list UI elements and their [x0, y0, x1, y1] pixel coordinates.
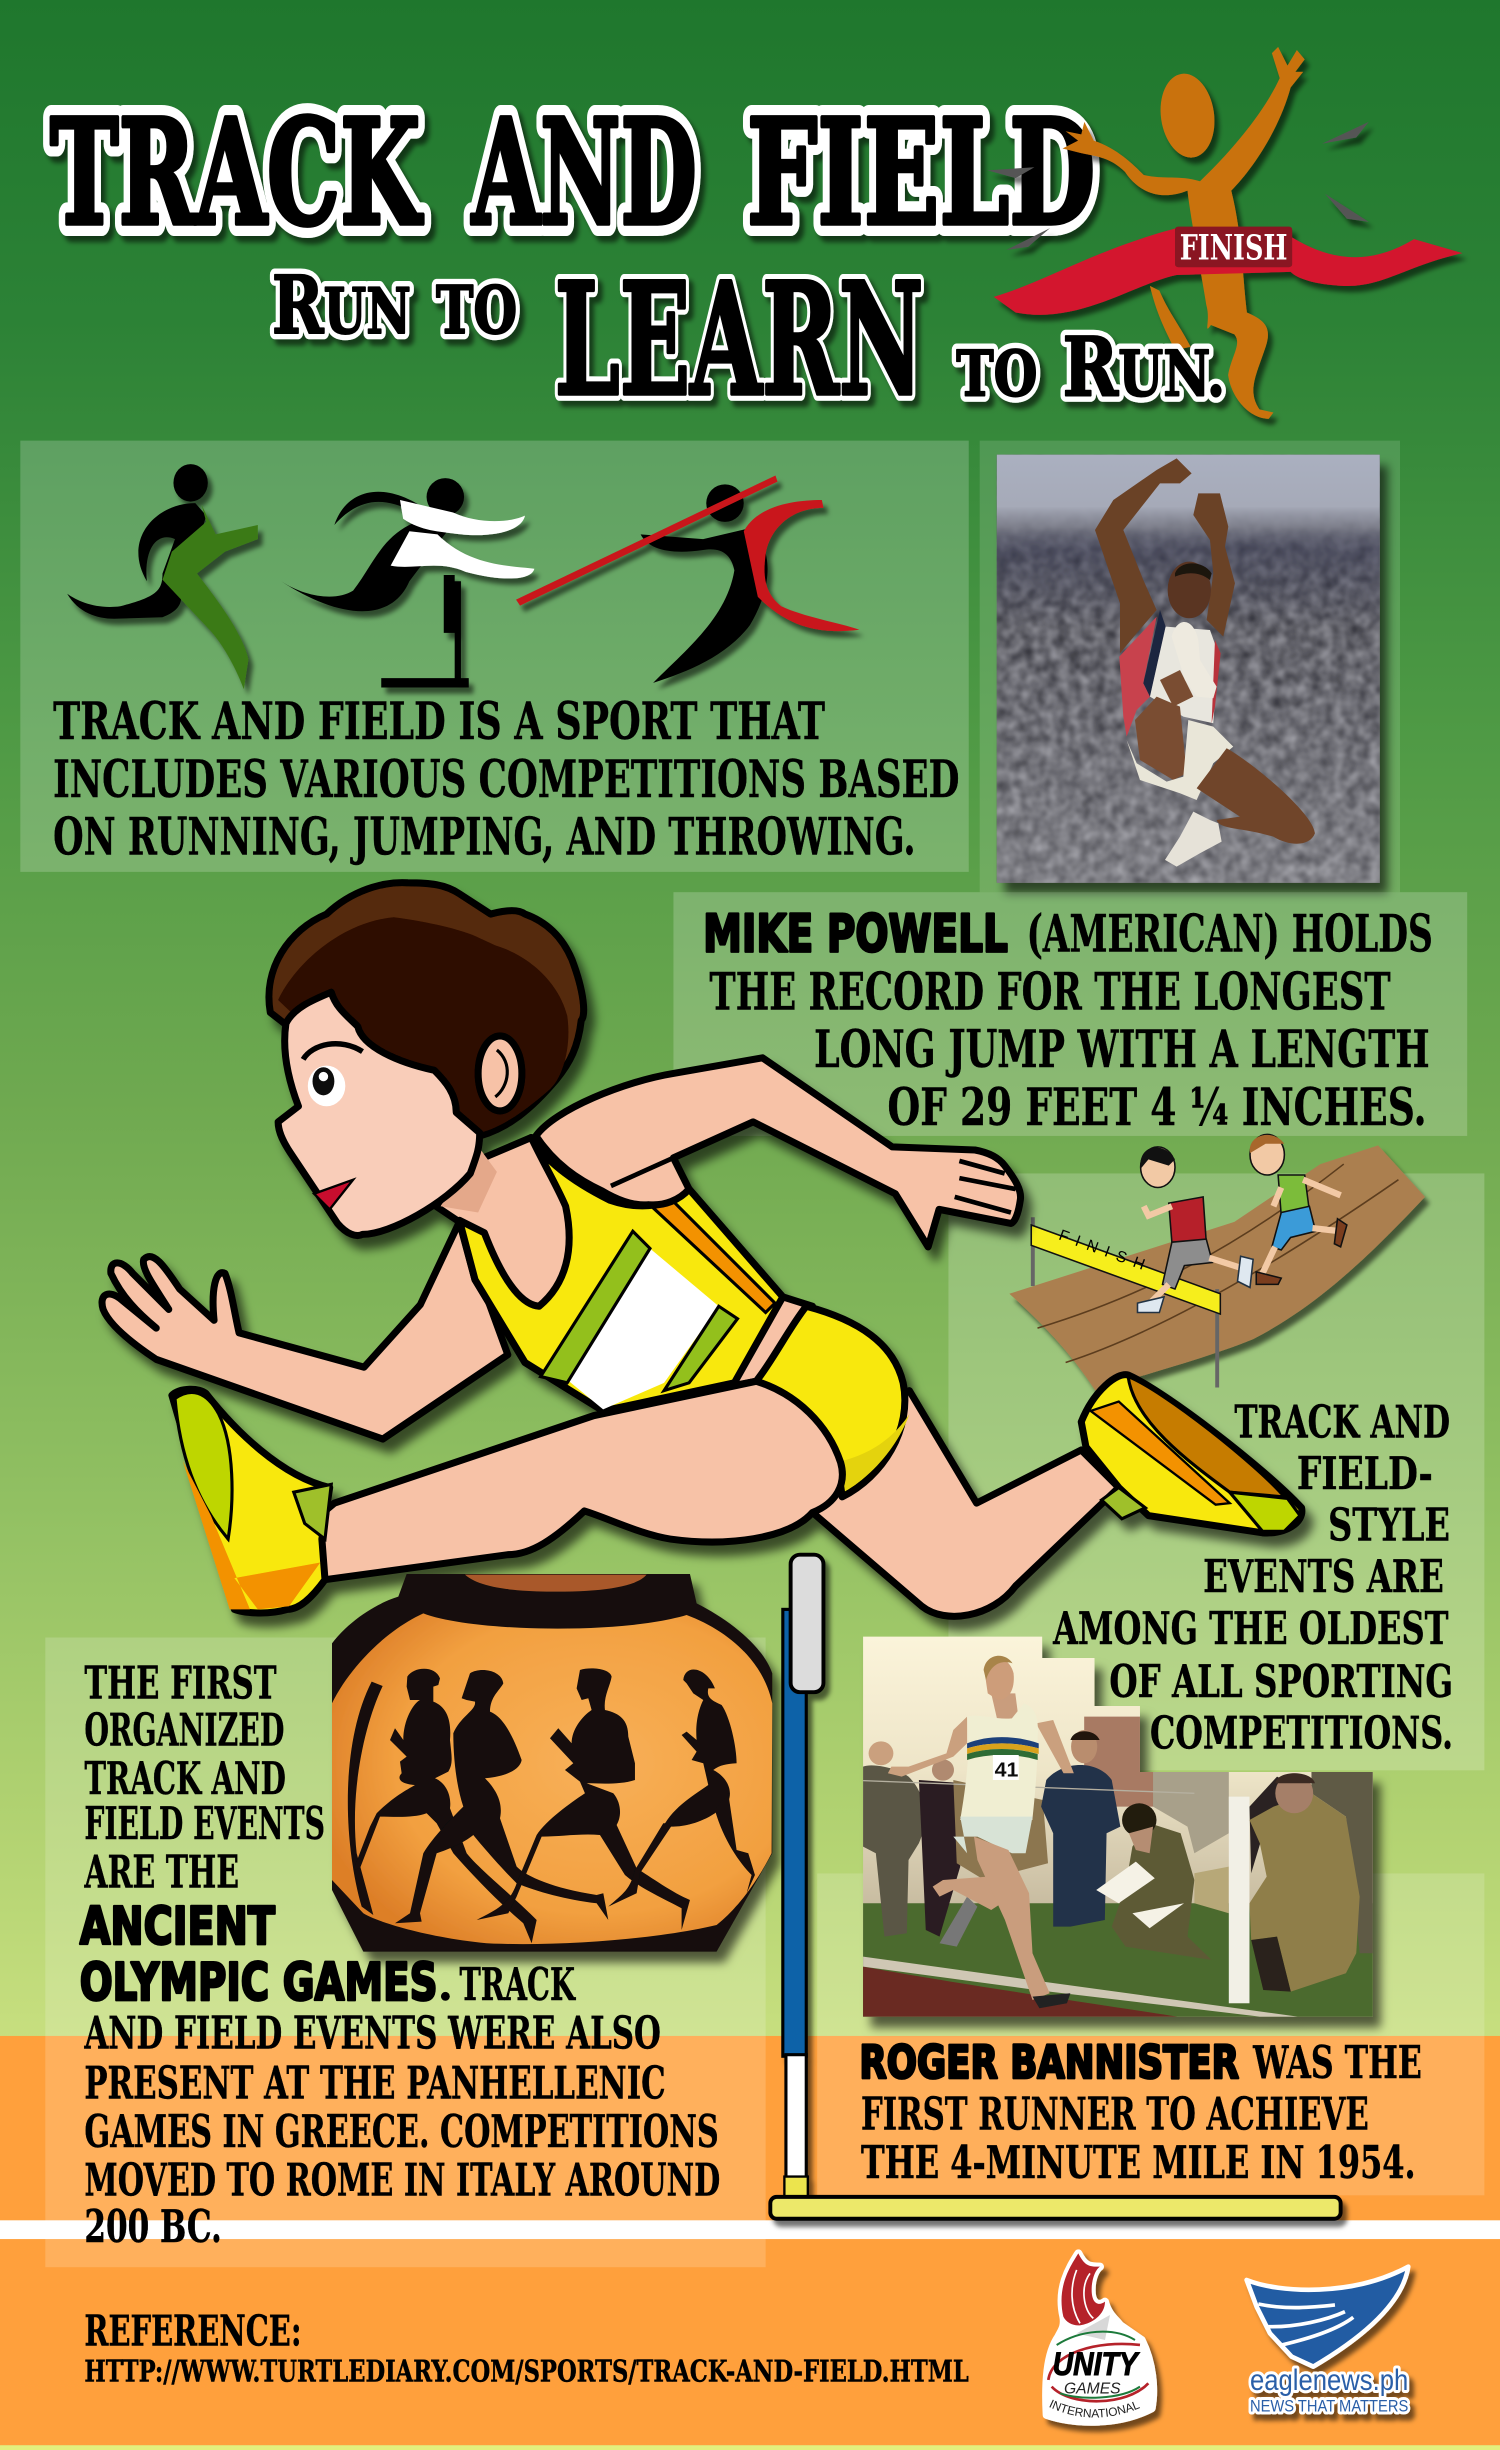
hurdle	[770, 1555, 1341, 2219]
hurdle pole	[783, 1609, 806, 2056]
building	[1084, 1717, 1194, 1807]
reference: HTTP://WWW.TURTLEDIARY.COM/SPORTS/TRACK-AND-FIELD.HTML	[84, 2353, 969, 2388]
sky	[997, 455, 1380, 627]
intro text: INCLUDES VARIOUS COMPETITIONS BASED	[53, 750, 959, 810]
subtitle	[272, 250, 1225, 431]
ancient olympics text: TRACK	[459, 1957, 576, 2011]
front thigh	[316, 1381, 842, 1580]
panel: intro	[20, 441, 969, 872]
head	[269, 883, 584, 1236]
crowd	[997, 455, 1380, 883]
Roger Bannister text: ROGER BANNISTER	[859, 2036, 1239, 2089]
pictogram: javelin thrower	[517, 477, 859, 683]
ancient olympics text: MOVED TO ROME IN ITALY AROUND	[84, 2152, 720, 2206]
photo: Mike Powell long jump	[997, 455, 1380, 883]
ancient olympics text: ARE THE	[84, 1844, 239, 1898]
intro text: TRACK AND FIELD IS A SPORT THAT	[53, 692, 825, 752]
subtitle outline: TO	[956, 336, 1038, 410]
subtitle letters	[272, 250, 1225, 431]
rings	[1048, 2344, 1148, 2401]
subtitle outline: TO	[436, 272, 517, 349]
finish line track illustration	[1009, 1134, 1425, 1391]
title letters: TRACK	[50, 88, 423, 258]
oldest events text: STYLE	[1328, 1498, 1450, 1552]
subtitle outline: RUN	[272, 258, 411, 352]
back leg	[781, 1391, 1119, 1616]
title outline: FIELD	[747, 88, 1095, 258]
logo: Unity Games International	[1042, 2249, 1166, 2436]
wing	[1247, 2267, 1408, 2367]
eyebrow	[303, 1044, 362, 1059]
track	[863, 1967, 1177, 2017]
vase runners	[353, 1668, 755, 1943]
subtitle letters: TO	[956, 336, 1038, 410]
orange lower band	[0, 2036, 1500, 2445]
subtitle letters: RUN	[272, 258, 411, 352]
finish ribbon	[994, 228, 1462, 315]
subtitle outline: RUN.	[1062, 320, 1225, 415]
logo: Eagle News	[1247, 2267, 1408, 2416]
intro text: ON RUNNING, JUMPING, AND THROWING.	[53, 808, 916, 868]
Mike Powell text	[703, 905, 1433, 1138]
title outline	[50, 88, 1095, 258]
ancient olympics text: FIELD EVENTS	[84, 1796, 325, 1850]
title outline: AND	[471, 88, 697, 258]
ancient olympics text: AND FIELD EVENTS WERE ALSO	[84, 2005, 661, 2059]
shorts shading	[842, 1414, 909, 1491]
title outline: TRACK	[50, 88, 423, 258]
Roger Bannister text	[859, 2035, 1422, 2189]
title	[50, 88, 1095, 258]
flame	[1062, 2253, 1105, 2325]
Roger running: 41	[995, 1759, 1019, 1782]
jumper	[1095, 458, 1315, 867]
white stripe	[0, 2220, 1500, 2239]
torso	[436, 1138, 812, 1411]
ancient olympics text: GAMES IN GREECE. COMPETITIONS	[84, 2104, 719, 2158]
hair	[269, 883, 584, 1136]
ancient olympics text: PRESENT AT THE PANHELLENIC	[84, 2055, 666, 2109]
bottom edge	[0, 2445, 1500, 2450]
reference	[84, 2305, 969, 2388]
subtitle letters: RUN.	[1062, 320, 1225, 415]
running child character	[102, 883, 1302, 1616]
Roger running	[888, 1656, 1074, 2008]
finish tag: FINISH	[1180, 228, 1288, 268]
singlet	[459, 1138, 783, 1411]
ancient olympics text: 200 BC.	[84, 2199, 222, 2253]
panel: Roger Bannister	[817, 1873, 1484, 2195]
pictogram: runner	[67, 464, 258, 689]
face	[278, 992, 480, 1236]
motion marks	[988, 122, 1369, 250]
panel: oldest events	[948, 1173, 1484, 1770]
title letters	[50, 88, 1095, 258]
finish banner: FINISH	[1056, 1227, 1154, 1276]
flame highlights	[1072, 2270, 1093, 2323]
front shoe	[172, 1389, 331, 1613]
tagline: NEWS THAT MATTERS	[1250, 2397, 1408, 2416]
wing stripes	[1258, 2304, 1353, 2345]
international wordmark: INTERNATIONAL	[1049, 2400, 1140, 2418]
spectators	[863, 1730, 1373, 2003]
boy in green shirt	[1250, 1134, 1347, 1284]
ancient olympics text: THE FIRST	[84, 1655, 277, 1709]
back arm	[102, 1222, 508, 1439]
ancient olympics text: TRACK AND	[84, 1751, 286, 1805]
stick figure	[1062, 47, 1305, 419]
vase body	[332, 1574, 772, 1952]
hurdle base	[770, 2197, 1341, 2219]
finish-line stick figure logo	[988, 47, 1462, 419]
Roger Bannister text: WAS THE	[1252, 2035, 1422, 2089]
photo: Roger Bannister	[863, 1637, 1373, 2017]
ancient olympics text	[80, 1655, 720, 2253]
Greek vase with runners	[332, 1574, 772, 1952]
subtitle outline: LEARN	[555, 250, 923, 431]
panel: Mike Powell record	[673, 892, 1467, 1138]
back shoe	[1081, 1375, 1302, 1533]
oldest events text: FIELD-	[1297, 1446, 1433, 1500]
finish banner	[1031, 1217, 1220, 1388]
Mike Powell text: MIKE POWELL	[703, 905, 1008, 965]
ancient olympics text: ANCIENT	[80, 1897, 275, 1957]
ancient olympics text: OLYMPIC GAMES	[80, 1953, 438, 2013]
hair dark area	[278, 917, 568, 1133]
games wordmark: GAMES	[1064, 2380, 1121, 2397]
subtitle outline	[272, 250, 1225, 431]
subtitle letters: TO	[436, 272, 517, 349]
mouth	[314, 1180, 353, 1209]
photo background	[863, 1637, 1373, 2017]
neck shading	[441, 1148, 497, 1212]
panel: ancient olympics	[45, 1638, 766, 2267]
pictogram: hurdler	[281, 478, 534, 688]
crowd lightening	[997, 625, 1380, 883]
logo outline	[1046, 2253, 1153, 2422]
vase palm	[348, 1682, 383, 1915]
eaglenews wordmark: eaglenews.ph	[1250, 2364, 1408, 2397]
boy in red shirt	[1138, 1147, 1253, 1312]
ancient olympics text: .	[438, 1957, 453, 2011]
reference: REFERENCE:	[84, 2305, 302, 2355]
grass	[863, 1903, 1373, 2017]
track	[1009, 1145, 1425, 1391]
fin	[1077, 2315, 1110, 2340]
title letters: FIELD	[747, 88, 1095, 258]
ancient olympics text: ORGANIZED	[84, 1702, 284, 1756]
subtitle letters: LEARN	[555, 250, 923, 431]
shorts	[756, 1306, 905, 1497]
kerb	[863, 1957, 1298, 2017]
unity wordmark: UNITY	[1053, 2345, 1140, 2382]
front arm	[536, 1058, 1021, 1247]
eye	[308, 1066, 345, 1106]
ear	[478, 1036, 522, 1111]
title letters: AND	[471, 88, 697, 258]
vase collar	[465, 1575, 647, 1592]
intro text	[53, 692, 959, 868]
finish tape	[863, 1781, 1194, 1793]
panel: long jump photo frame	[980, 441, 1400, 892]
oldest events text	[1052, 1394, 1453, 1759]
